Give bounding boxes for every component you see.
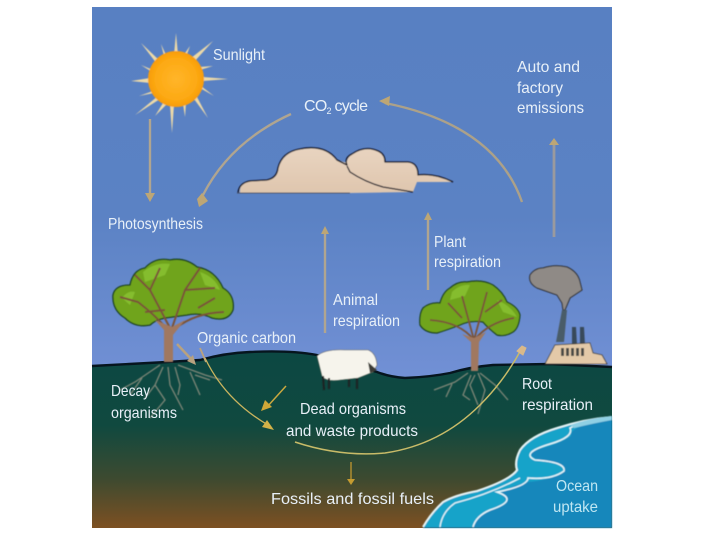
arrow: auto and factory emissions — [549, 138, 559, 237]
arrow: organic carbon to dead organisms — [200, 348, 274, 430]
trunk — [462, 332, 486, 371]
label: Dead organisms and waste products: Dead organisms — [300, 401, 406, 418]
arrow: emissions to CO2 cycle — [379, 96, 522, 202]
label: Ocean uptake: Ocean — [556, 478, 598, 495]
icon: sun — [131, 33, 228, 133]
panel: sky background — [92, 7, 612, 387]
factory building — [545, 343, 607, 364]
label: Animal respiration: Animal — [333, 292, 378, 309]
trunk — [155, 320, 185, 362]
sun rays — [131, 33, 228, 133]
tree left — [113, 259, 233, 418]
roots — [120, 365, 222, 418]
arrow: root respiration — [295, 346, 526, 454]
arrow: animal respiration — [321, 226, 329, 333]
crown — [420, 281, 520, 336]
arrow: into dead organisms — [261, 386, 286, 411]
branches — [120, 268, 224, 330]
label: Organic carbon: Organic carbon — [197, 330, 296, 347]
factory windows — [561, 348, 584, 356]
crown — [113, 259, 233, 326]
label: Decay organisms: organisms — [111, 405, 177, 422]
label: Plant respiration: Plant — [434, 234, 466, 251]
sun disc — [148, 51, 204, 107]
leaf highlights — [122, 264, 220, 305]
label: Fossils and fossil fuels: Fossils and fossil fuels — [271, 491, 434, 508]
label: Animal respiration: respiration — [333, 313, 400, 330]
arrow: plant respiration — [424, 212, 432, 290]
label: Photosynthesis: Photosynthesis — [108, 216, 203, 233]
leaf highlights — [450, 285, 517, 317]
chimneys — [556, 310, 567, 342]
roots — [434, 373, 508, 414]
label: Root respiration: respiration — [522, 397, 593, 414]
arrow: to fossils — [347, 462, 355, 485]
label: Plant respiration: respiration — [434, 254, 501, 271]
clouds — [237, 148, 453, 193]
label: CO2 cycle: CO — [304, 98, 327, 115]
label: Auto and factory emissions — [517, 59, 584, 117]
arrow: organic carbon to soil — [177, 344, 196, 365]
label: CO2 cycle: 2 — [327, 106, 332, 116]
cloud outlines — [238, 148, 453, 193]
label: Root respiration: Root — [522, 376, 552, 393]
horizon line — [92, 351, 612, 378]
label: Dead organisms and waste products — [286, 401, 418, 440]
factory — [530, 266, 607, 364]
label: Auto and factory emissions: Auto and — [517, 59, 580, 76]
panel: soil — [92, 351, 612, 528]
smoke — [530, 266, 582, 310]
label: CO2 cycle: cycle — [331, 98, 368, 115]
label: Sunlight: Sunlight — [213, 47, 265, 64]
label: Dead organisms and waste products: and waste products — [286, 423, 418, 440]
ocean — [423, 416, 612, 528]
label: Auto and factory emissions: factory — [517, 80, 563, 97]
cloud left — [240, 148, 413, 193]
label: Root respiration — [522, 376, 593, 414]
label: Decay organisms: Decay — [111, 383, 150, 400]
label: Plant respiration — [434, 234, 501, 271]
arrow: CO2 cycle to photosynthesis — [197, 114, 291, 207]
arrow: sunlight to photosynthesis — [145, 119, 155, 202]
sheep — [317, 350, 377, 390]
label: Animal respiration — [333, 292, 400, 330]
branches — [430, 292, 514, 340]
cloud right — [346, 149, 453, 192]
label: Ocean uptake — [553, 478, 598, 516]
tree right — [420, 281, 520, 414]
label: Decay organisms — [111, 383, 177, 422]
label: Ocean uptake: uptake — [553, 499, 598, 516]
label: Auto and factory emissions: emissions — [517, 100, 584, 117]
